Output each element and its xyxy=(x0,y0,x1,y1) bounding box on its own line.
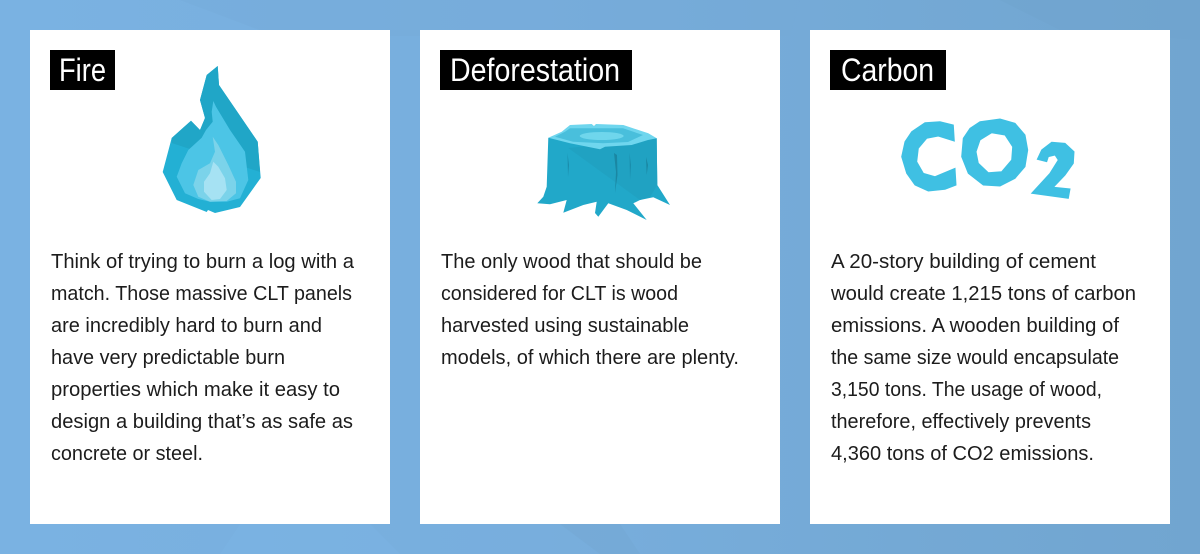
panel: fire xyxy=(30,30,390,524)
text: fire body: are incredibly hard to burn and xyxy=(51,315,322,337)
heading: Deforestation: Deforestation xyxy=(450,52,620,88)
panel: deforestation xyxy=(420,30,780,524)
text: carbon body: A 20-story building of cement xyxy=(831,251,1096,273)
heading: Fire: Fire xyxy=(59,52,106,88)
text: carbon body: therefore, effectively prevents xyxy=(831,411,1091,433)
text: carbon body: 4,360 tons of CO2 emissions. xyxy=(831,443,1094,465)
text: deforestation body xyxy=(441,251,739,369)
text: carbon body: 3,150 tons. The usage of wood, xyxy=(831,379,1102,401)
icon: CO2 xyxy=(902,119,1074,198)
icon: tree stump xyxy=(537,124,670,220)
text: fire body: properties which make it easy to xyxy=(51,379,340,401)
panel: carbon xyxy=(810,30,1170,524)
text: fire body: concrete or steel. xyxy=(51,443,203,465)
text: fire body xyxy=(51,251,355,465)
text: carbon body xyxy=(830,251,1136,465)
text: deforestation body: harvested using sustainable xyxy=(441,315,689,337)
text: fire body: match. Those massive CLT panels xyxy=(51,283,352,305)
text: fire body: Think of trying to burn a log with a xyxy=(51,251,355,273)
text: deforestation body: models, of which there are plenty. xyxy=(441,347,739,369)
text: fire body: design a building that’s as safe as xyxy=(51,411,353,433)
text: carbon body: emissions. A wooden building of xyxy=(831,315,1119,337)
text: deforestation body: The only wood that should be xyxy=(441,251,702,273)
text: carbon body: would create 1,215 tons of carbon xyxy=(830,283,1136,305)
text: fire body: have very predictable burn xyxy=(51,347,285,369)
text: carbon body: the same size would encapsulate xyxy=(831,347,1119,369)
heading: Carbon: Carbon xyxy=(841,52,934,88)
icon: flame xyxy=(163,66,261,213)
text: deforestation body: considered for CLT is wood xyxy=(441,283,678,305)
